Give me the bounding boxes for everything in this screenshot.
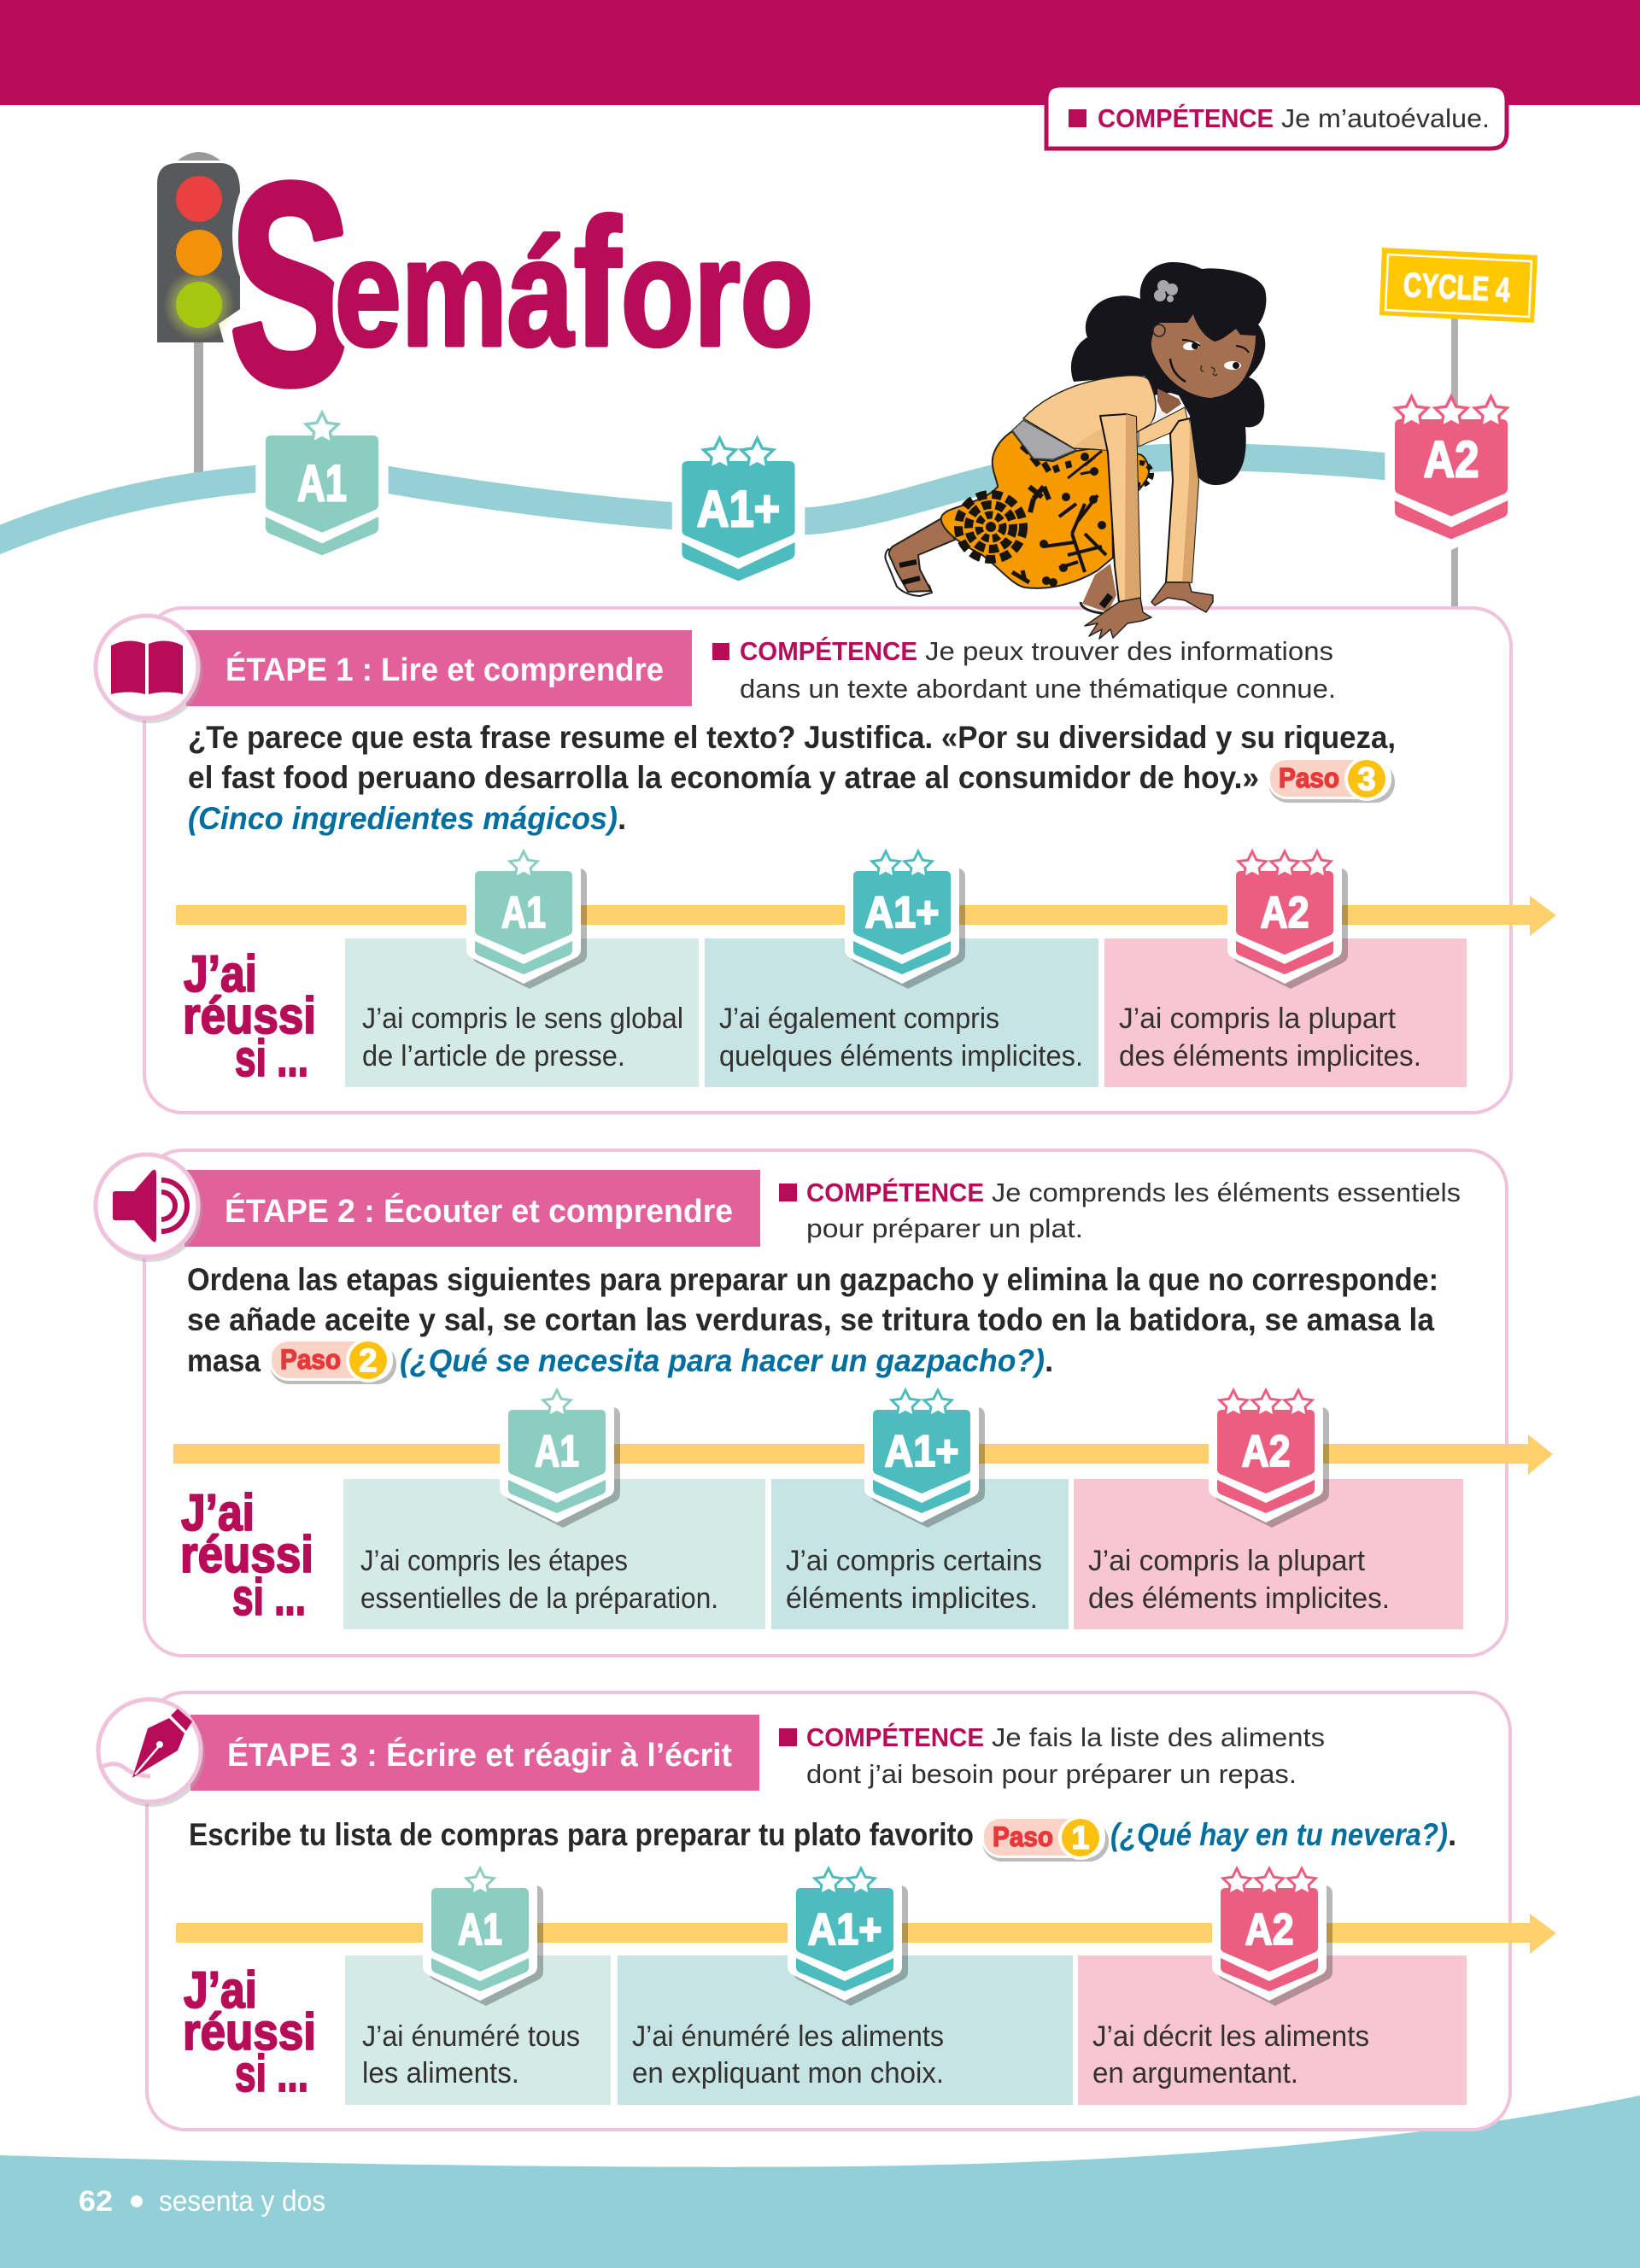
page number footer: sesenta y dos bbox=[159, 2185, 325, 2218]
panel 3 heading strip: ÉTAPE 3 : Écrire et réagir à l’écrit bbox=[227, 1736, 732, 1774]
panel 2 heading strip: ÉTAPE 2 : Écouter et comprendre bbox=[225, 1192, 733, 1230]
long black hair bbox=[1071, 262, 1266, 485]
panel 1 progress arrow bbox=[176, 896, 1556, 936]
panel 3 heading strip bbox=[190, 1715, 759, 1791]
panel 2 question: (¿Qué se necesita para hacer un gazpacho?) bbox=[400, 1343, 1045, 1378]
panel 3 competence: COMPÉTENCE bbox=[806, 1722, 984, 1752]
page number footer bbox=[79, 2185, 325, 2218]
panel 3 progress arrow bbox=[176, 1914, 1556, 1954]
panel 1 paso badge: 3 bbox=[1357, 762, 1376, 798]
panel 3 badge A1: A1 bbox=[458, 1905, 502, 1955]
panel 1 question bbox=[188, 720, 1396, 836]
panel 2 box A1+: éléments implicites. bbox=[786, 1582, 1038, 1615]
panel 3 instruction: (¿Qué hay en tu nevera?) bbox=[1110, 1817, 1448, 1852]
grey waistband bbox=[1012, 420, 1076, 459]
panel 3 badge A2: A2 bbox=[1245, 1905, 1293, 1955]
panel 1 competence bbox=[712, 636, 1336, 704]
panel 1 competence: Je peux trouver des informations bbox=[925, 636, 1333, 666]
panel 1 box A1: J’ai compris le sens global bbox=[362, 1002, 683, 1035]
title bbox=[230, 126, 813, 443]
panel 1 heading strip: ÉTAPE 1 : Lire et comprendre bbox=[226, 651, 664, 688]
panel 2 badge A1+: A1+ bbox=[885, 1427, 958, 1476]
character: girl in starting position bbox=[885, 262, 1266, 639]
neck bbox=[1157, 389, 1181, 416]
competence tab bbox=[1046, 85, 1507, 149]
panel 2 label: J’ai bbox=[181, 1484, 255, 1541]
wave road bbox=[0, 457, 1401, 543]
panel 3: écrire et réagir à l'écrit bbox=[98, 1692, 1556, 2130]
panel 3 box A1: J’ai énuméré tous bbox=[362, 2020, 580, 2053]
top level marker A2 bbox=[1385, 396, 1518, 550]
panel 3 box A1+: J’ai énuméré les aliments bbox=[632, 2020, 944, 2053]
panel 2 competence: Je comprends les éléments essentiels bbox=[992, 1178, 1461, 1207]
panel 3 box A1+: en expliquant mon choix. bbox=[632, 2057, 944, 2090]
panel 2 question: . bbox=[1045, 1343, 1053, 1378]
panel 1 question: . bbox=[618, 801, 626, 836]
panel 2 progress arrow bbox=[173, 1435, 1553, 1475]
panel 2 question: se añade aceite y sal, se cortan las verduras, se tritura todo en la batidora, se amasa la bbox=[187, 1302, 1434, 1337]
panel 1 paso badge: Paso bbox=[1279, 763, 1339, 793]
panel 2 box A1: essentielles de la préparation. bbox=[360, 1582, 718, 1615]
panel 3 badge A2 bbox=[1212, 1868, 1332, 2006]
panel 1 label: réussi bbox=[183, 987, 316, 1044]
panel 1 label bbox=[183, 945, 316, 1087]
panel 2 question: masa bbox=[187, 1343, 261, 1378]
panel 1 box A2 bbox=[1104, 938, 1467, 1087]
panel 3 label: réussi bbox=[183, 2003, 316, 2060]
top level marker A1+ bbox=[672, 438, 805, 592]
panel 3 label bbox=[183, 1961, 316, 2102]
panel 1 label: si ... bbox=[235, 1030, 308, 1087]
panel 2: écouter et comprendre bbox=[96, 1150, 1553, 1656]
panel 3 badge A1 bbox=[423, 1868, 543, 2006]
page number footer: 62 bbox=[79, 2185, 113, 2218]
panel 3 label: J’ai bbox=[184, 1961, 257, 2019]
panel 3 competence: Je fais la liste des aliments bbox=[992, 1722, 1325, 1752]
panel 3 box A2 bbox=[1078, 1955, 1467, 2105]
panel 2 box A1+: J’ai compris certains bbox=[786, 1545, 1042, 1577]
panel 3 round icon: fountain pen bbox=[98, 1699, 205, 1807]
panel 2 badge A2 bbox=[1209, 1390, 1329, 1528]
far arm bbox=[1166, 418, 1198, 582]
panel 1 label: J’ai bbox=[184, 945, 257, 1002]
top bbox=[1023, 376, 1187, 450]
panel 2 competence: pour préparer un plat. bbox=[806, 1213, 1083, 1243]
panel 2 box A1 bbox=[343, 1479, 765, 1629]
panel 1 box A1: de l’article de presse. bbox=[362, 1040, 625, 1073]
panel 3 frame bbox=[147, 1692, 1510, 2130]
panel 1 box A1+ bbox=[705, 938, 1098, 1087]
panel 1 competence: dans un texte abordant une thématique connue. bbox=[740, 674, 1336, 704]
panel 2 heading strip bbox=[184, 1170, 760, 1247]
panel 1 badge A2: A2 bbox=[1261, 888, 1309, 938]
panel 1 badge A1 bbox=[466, 851, 587, 989]
panel 2 question: Ordena las etapas siguientes para preparar un gazpacho y elimina la que no corresponde: bbox=[187, 1262, 1438, 1297]
panel 2 competence: COMPÉTENCE bbox=[806, 1178, 984, 1207]
competence tab: COMPÉTENCE bbox=[1098, 103, 1274, 133]
hair flower bbox=[1154, 280, 1178, 302]
top level marker A1: A1 bbox=[297, 454, 347, 512]
panel 1 box A1+: J’ai également compris bbox=[719, 1002, 999, 1035]
panel 2 question bbox=[187, 1262, 1438, 1378]
panel 1 question: (Cinco ingredientes mágicos) bbox=[188, 801, 618, 836]
panel 1 competence: COMPÉTENCE bbox=[740, 636, 917, 666]
title: S bbox=[230, 126, 351, 443]
panel 1 box A2: des éléments implicites. bbox=[1119, 1040, 1421, 1073]
panel 2 badge A1+ bbox=[864, 1390, 985, 1528]
cycle 4 pole bbox=[1451, 313, 1458, 608]
panel 1 question: el fast food peruano desarrolla la economía y atrae al consumidor de hoy.» bbox=[188, 760, 1259, 795]
bottom teal footer wave bbox=[0, 2096, 1640, 2268]
panel 3 instruction bbox=[189, 1817, 1456, 1852]
top level marker A2: A2 bbox=[1424, 430, 1479, 488]
panel 2 box A1: J’ai compris les étapes bbox=[360, 1545, 628, 1577]
panel 3 competence bbox=[779, 1722, 1325, 1789]
panel 2 frame bbox=[144, 1150, 1507, 1656]
panel 1: lire et comprendre bbox=[96, 608, 1556, 1113]
panel 1 box A1+: quelques éléments implicites. bbox=[719, 1040, 1083, 1073]
panel 2 box A2 bbox=[1074, 1479, 1463, 1629]
skirt bbox=[941, 431, 1151, 588]
panel 1 badge A1+: A1+ bbox=[864, 888, 940, 938]
panel 3 badge A1+ bbox=[788, 1868, 908, 2006]
panel 2 label: si ... bbox=[232, 1569, 306, 1626]
panel 1 question: ¿Te parece que esta frase resume el texto? Justifica. «Por su diversidad y su riqueza, bbox=[188, 720, 1396, 755]
panel 3 paso badge: Paso bbox=[993, 1821, 1053, 1852]
panel 2 paso badge: 2 bbox=[359, 1343, 378, 1379]
panel 1 box A2: J’ai compris la plupart bbox=[1119, 1002, 1397, 1035]
panel 2 paso badge bbox=[269, 1338, 396, 1384]
panel 1 badge A2 bbox=[1227, 851, 1348, 989]
cycle 4 sign: CYCLE 4 bbox=[1403, 266, 1512, 309]
panel 1 badge A1+ bbox=[845, 851, 965, 989]
cycle 4 sign bbox=[1379, 248, 1538, 323]
panel 2 box A2: des éléments implicites. bbox=[1088, 1582, 1390, 1615]
panel 2 paso badge: Paso bbox=[280, 1344, 341, 1375]
panel 3 box A2: en argumentant. bbox=[1092, 2057, 1298, 2090]
front leg and sandal bbox=[1081, 564, 1116, 614]
panel 2 label bbox=[180, 1484, 313, 1626]
far hand bbox=[1151, 582, 1213, 612]
panel 3 competence: dont j’ai besoin pour préparer un repas. bbox=[806, 1759, 1297, 1789]
panel 3 paso badge: 1 bbox=[1071, 1821, 1090, 1856]
panel 2 badge A1: A1 bbox=[535, 1427, 579, 1476]
panel 1 box A1 bbox=[345, 938, 699, 1087]
panel 3 box A1+ bbox=[618, 1955, 1073, 2105]
panel 1 frame bbox=[144, 608, 1511, 1113]
panel 3 label: si ... bbox=[235, 2045, 308, 2102]
panel 3 box A1: les aliments. bbox=[362, 2057, 519, 2090]
panel 2 label: réussi bbox=[180, 1526, 313, 1583]
panel 3 paso badge bbox=[981, 1815, 1109, 1862]
panel 2 round icon: speaker bbox=[96, 1154, 202, 1262]
panel 2 competence bbox=[779, 1178, 1461, 1243]
back leg and sandal bbox=[885, 517, 955, 596]
near arm bbox=[1100, 414, 1140, 602]
top level marker A1+: A1+ bbox=[697, 480, 780, 538]
panel 3 box A1 bbox=[345, 1955, 611, 2105]
panel 1 round icon: book bbox=[96, 616, 202, 723]
panel 3 instruction: Escribe tu lista de compras para preparar tu plato favorito bbox=[189, 1817, 974, 1852]
top magenta bar bbox=[0, 0, 1640, 105]
top level marker A1 bbox=[255, 412, 389, 566]
panel 1 badge A1: A1 bbox=[501, 888, 546, 938]
panel 2 box A1+ bbox=[771, 1479, 1069, 1629]
panel 3 instruction: . bbox=[1448, 1817, 1456, 1852]
panel 1 paso badge bbox=[1268, 757, 1395, 803]
panel 2 box A2: J’ai compris la plupart bbox=[1088, 1545, 1366, 1577]
panel 3 box A2: J’ai décrit les aliments bbox=[1092, 2020, 1369, 2053]
title: emáforo bbox=[335, 181, 813, 383]
panel 2 badge A2: A2 bbox=[1242, 1427, 1290, 1476]
traffic light bbox=[157, 152, 240, 478]
panel 1 heading strip bbox=[186, 630, 692, 706]
face bbox=[1151, 314, 1256, 398]
near hand bbox=[1085, 598, 1151, 639]
panel 3 badge A1+: A1+ bbox=[808, 1905, 882, 1955]
panel 2 badge A1 bbox=[500, 1390, 620, 1528]
competence tab: Je m’autoévalue. bbox=[1281, 103, 1490, 133]
